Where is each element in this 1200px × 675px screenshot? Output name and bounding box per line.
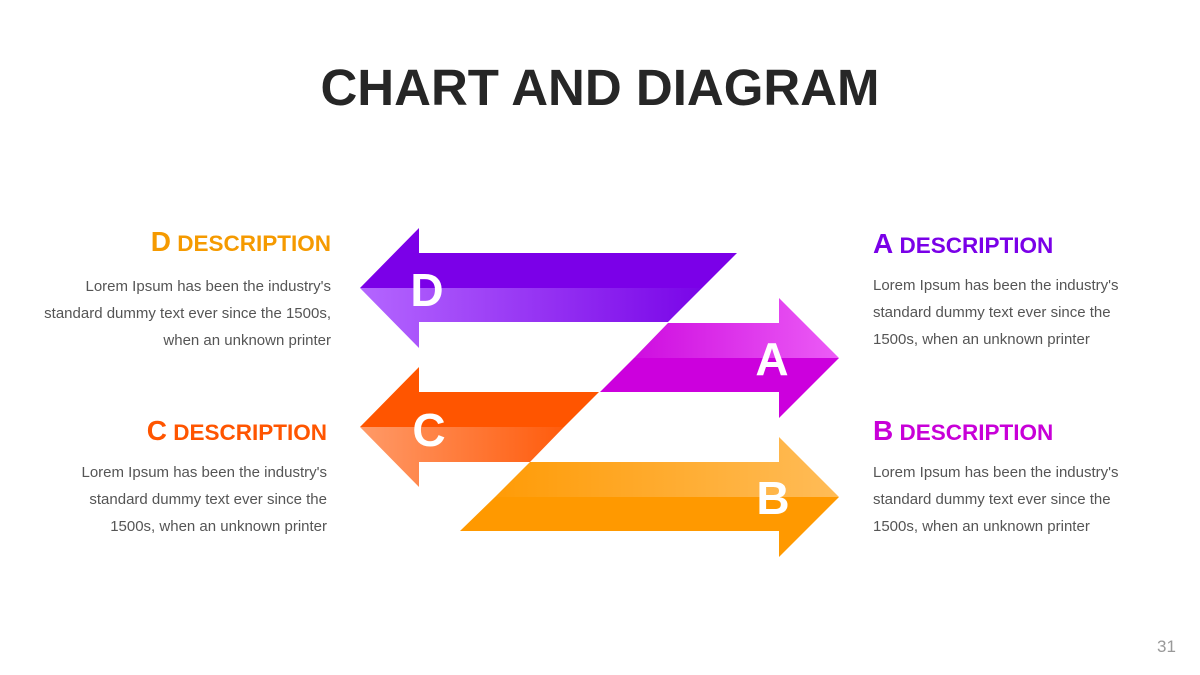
arrow A (600, 298, 839, 418)
text block: C: Lorem Ipsum has been the industry's (82, 464, 327, 481)
arrow B (460, 437, 839, 557)
text block: B: B DESCRIPTION (873, 415, 1053, 446)
arrow A: A (755, 333, 789, 385)
text block: A: Lorem Ipsum has been the industry's (873, 277, 1118, 294)
text block: D (44, 226, 331, 349)
arrow D (360, 228, 737, 348)
text block: A: A DESCRIPTION (873, 228, 1053, 259)
text block: D: when an unknown printer (163, 332, 331, 349)
text block: C: 1500s, when an unknown printer (110, 518, 327, 535)
text block: B: standard dummy text ever since the (873, 491, 1111, 508)
text block: A (873, 228, 1118, 348)
title: CHART AND DIAGRAM (320, 59, 880, 116)
arrow B: B (756, 472, 790, 524)
text block: C (82, 415, 327, 535)
text block: B (873, 415, 1118, 535)
text block: C: standard dummy text ever since the (89, 491, 327, 508)
text block: B: 1500s, when an unknown printer (873, 518, 1090, 535)
text block: C: C DESCRIPTION (147, 415, 327, 446)
text block: D: Lorem Ipsum has been the industry's (86, 278, 331, 295)
arrow D: D (410, 264, 444, 316)
page number: 31 (1157, 637, 1176, 656)
arrow C (360, 367, 599, 487)
text block: A: standard dummy text ever since the (873, 304, 1111, 321)
text block: D: standard dummy text ever since the 1500s, (44, 305, 331, 322)
arrow C: C (412, 404, 446, 456)
text block: B: Lorem Ipsum has been the industry's (873, 464, 1118, 481)
text block: D: D DESCRIPTION (151, 226, 331, 257)
text block: A: 1500s, when an unknown printer (873, 331, 1090, 348)
